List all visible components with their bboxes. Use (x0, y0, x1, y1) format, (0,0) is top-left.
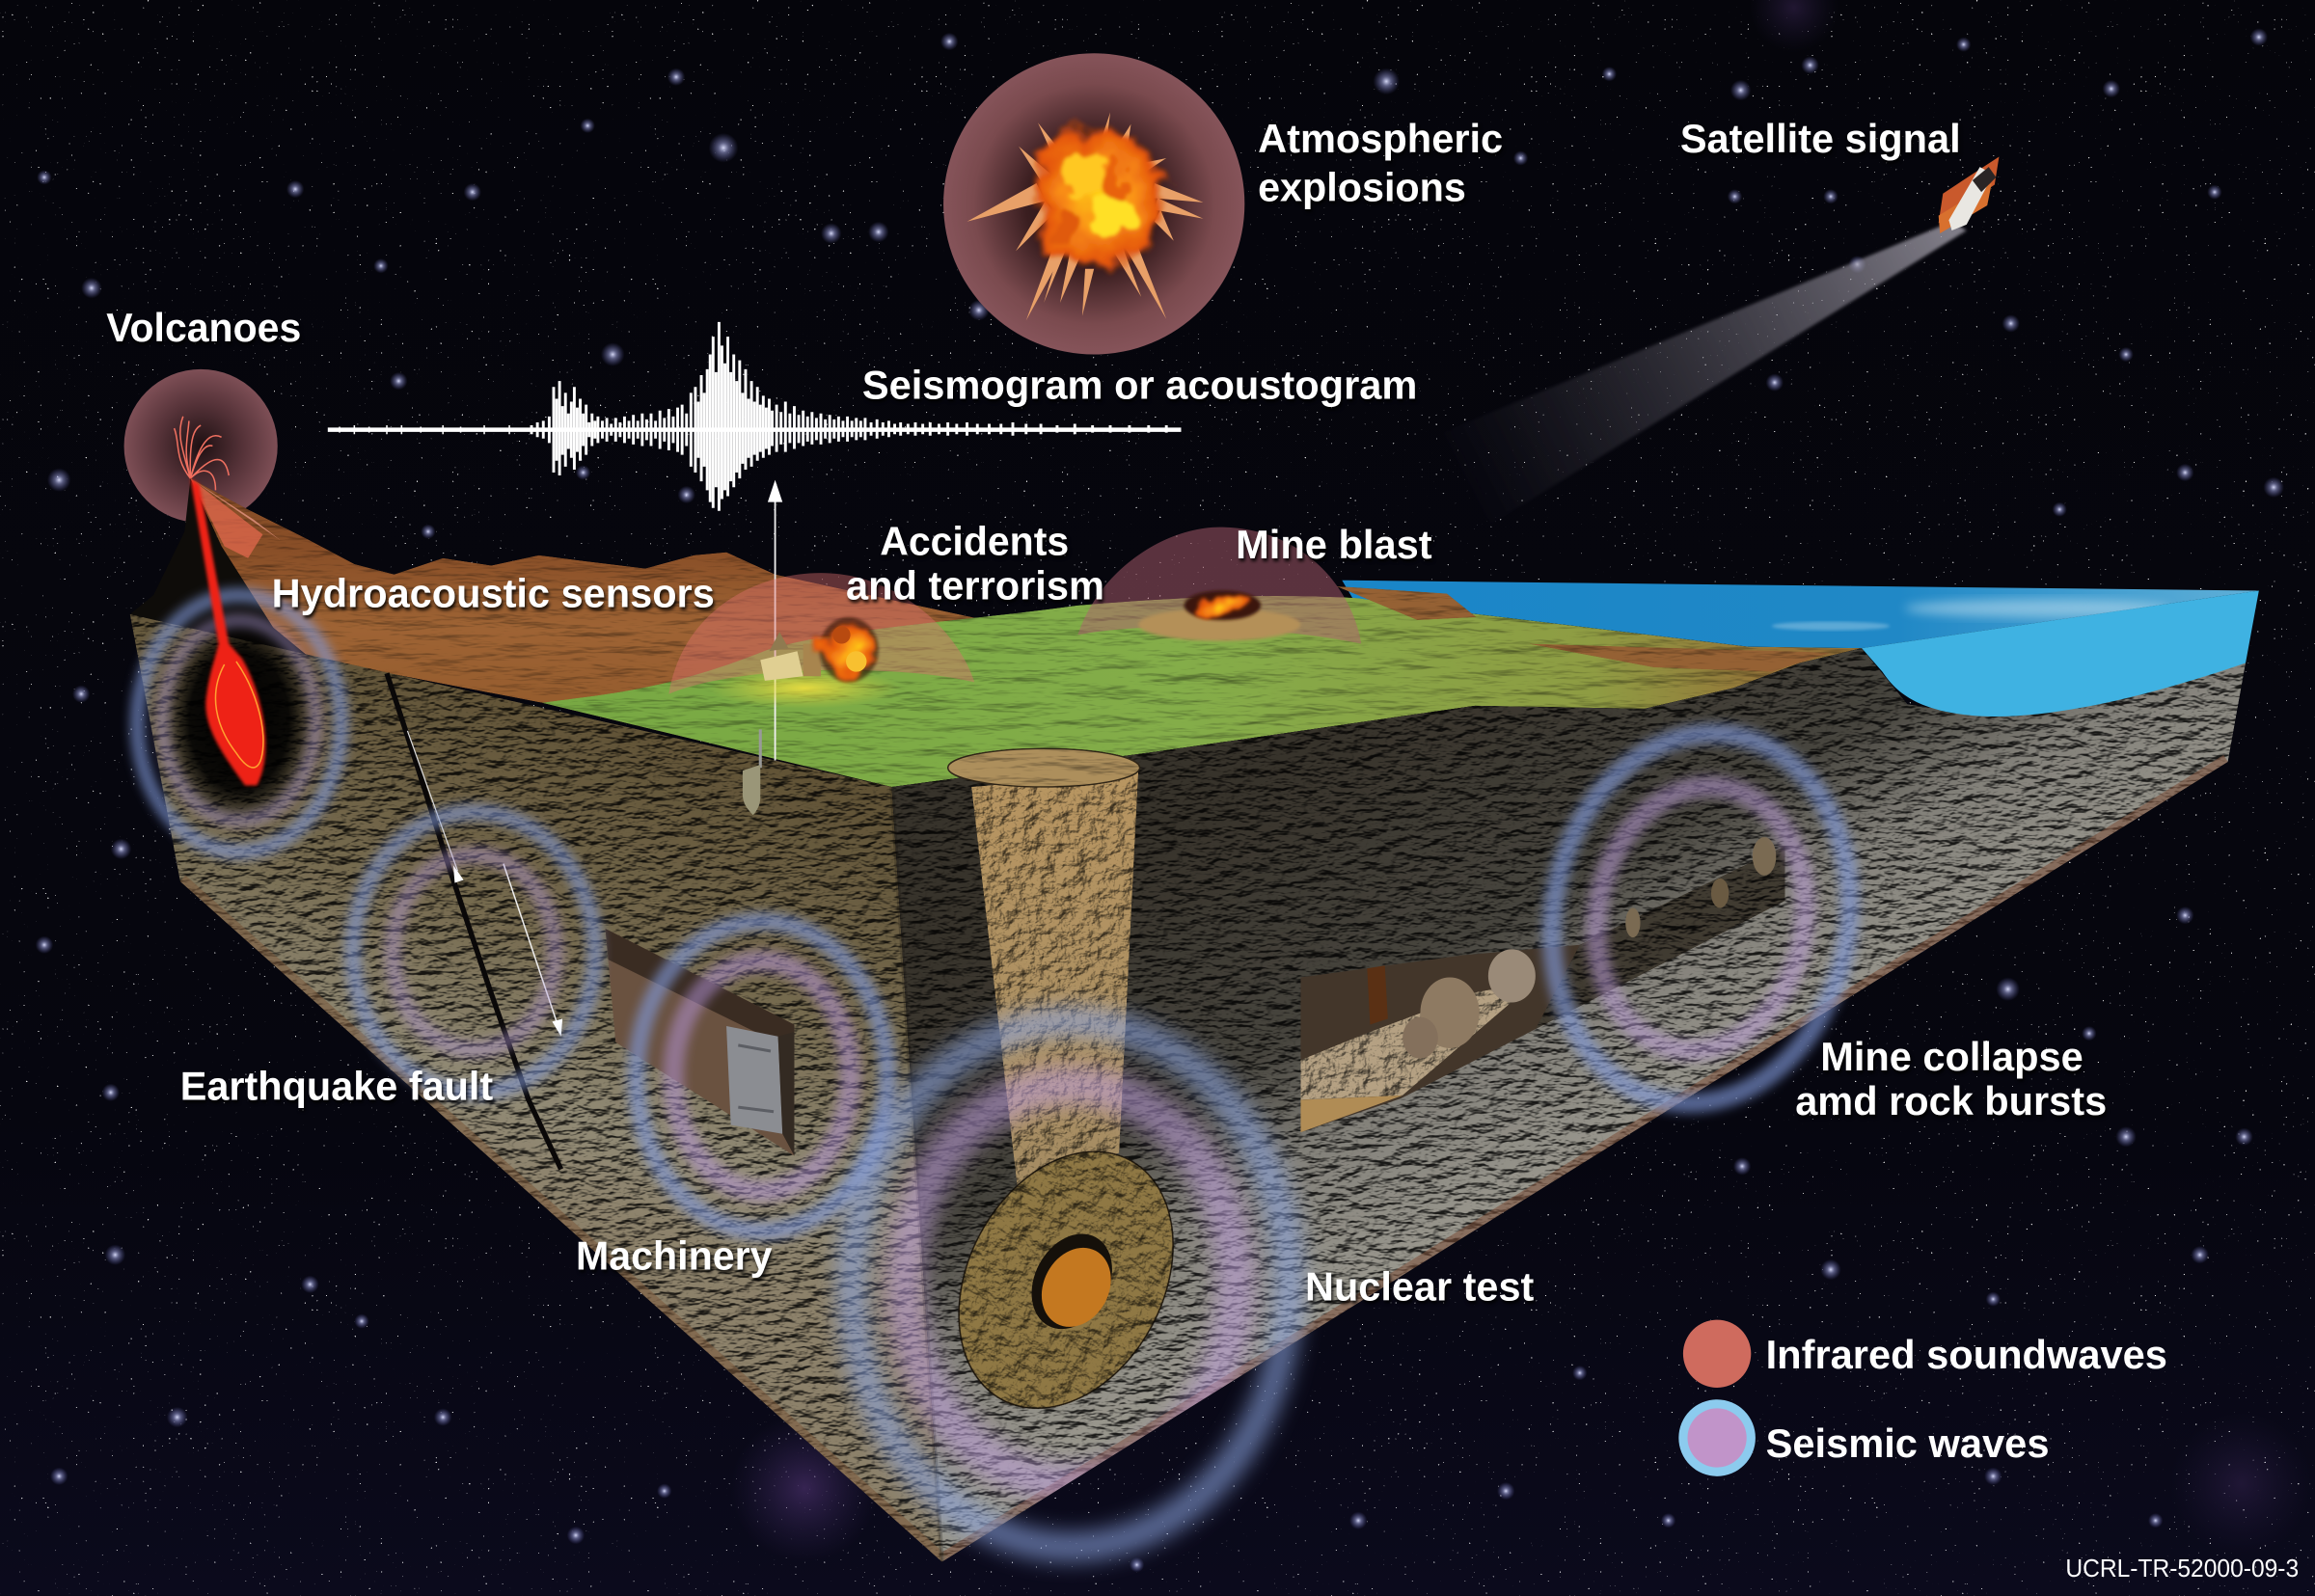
fireball (1027, 124, 1169, 272)
atmospheric explosion bubble (943, 53, 1244, 355)
seismogram trace (328, 322, 1181, 511)
earthquake fault line (387, 673, 562, 1169)
label: satellite signal: Satellite signal (1680, 117, 1961, 161)
magma conduit and chamber (190, 478, 265, 785)
block left face (130, 614, 942, 1562)
mine tunnel (1300, 837, 1785, 1132)
label: earthquake fault: Earthquake fault (180, 1065, 493, 1109)
volcano bubble (124, 369, 278, 523)
machinery chamber (606, 929, 794, 1156)
shoreline soil (1336, 586, 1831, 672)
label: atmospheric explosions: explosions (1258, 165, 1466, 209)
label: accidents and terrorism: Accidents (880, 520, 1069, 564)
sensor and signal arrow (743, 480, 782, 815)
rings: earthquake fault (353, 812, 595, 1093)
seismic wave rings (137, 595, 1878, 1231)
legend: infrared soundwaves: Infrared soundwaves (1766, 1333, 2167, 1377)
bottom rim of block (180, 762, 2228, 1562)
explosion spikes (967, 113, 1203, 320)
legend (1678, 1320, 2167, 1476)
label: mine collapse (1795, 1035, 2107, 1123)
satellite signal beam (1417, 222, 1967, 525)
grass surface (542, 596, 1862, 787)
legend: seismic waves (1678, 1399, 2049, 1476)
nuclear test seismic rings (852, 1021, 1289, 1547)
dome: mine blast (1077, 527, 1361, 644)
label: machinery: Machinery (576, 1234, 773, 1279)
labels (106, 117, 2107, 1310)
label: accidents and terrorism (846, 520, 1104, 609)
rings: mine collapse (1523, 710, 1878, 1127)
nuclear test shaft (948, 748, 1140, 1187)
legend: infrared soundwaves (1683, 1320, 2167, 1388)
rings: machinery (637, 921, 887, 1231)
report number: UCRL-TR-52000-09-3 (2065, 1554, 2299, 1582)
dome: accidents and terrorism (668, 573, 974, 709)
nuclear test cavity (916, 1114, 1215, 1446)
legend: seismic waves: Seismic waves (1766, 1421, 2049, 1466)
block right face (891, 648, 2246, 1562)
rings: volcano (137, 595, 341, 852)
label: volcanoes: Volcanoes (106, 306, 301, 350)
label: atmospheric explosions: Atmospheric (1258, 117, 1503, 161)
label: mine collapse: Mine collapse (1820, 1035, 2084, 1079)
label: hydroacoustic sensors: Hydroacoustic sensors (272, 571, 715, 615)
label: atmospheric explosions (1258, 117, 1503, 209)
label: nuclear test: Nuclear test (1305, 1265, 1535, 1310)
water side face (1862, 590, 2259, 717)
icon: satellite (1939, 156, 1999, 233)
water surface (1342, 581, 2259, 648)
label: mine blast: Mine blast (1236, 523, 1432, 567)
label: mine collapse: amd rock bursts (1795, 1079, 2107, 1123)
label: seismogram: Seismogram or acoustogram (862, 363, 1417, 407)
surface: hills and plain (130, 478, 1122, 787)
label: accidents and terrorism: and terrorism (846, 564, 1104, 609)
